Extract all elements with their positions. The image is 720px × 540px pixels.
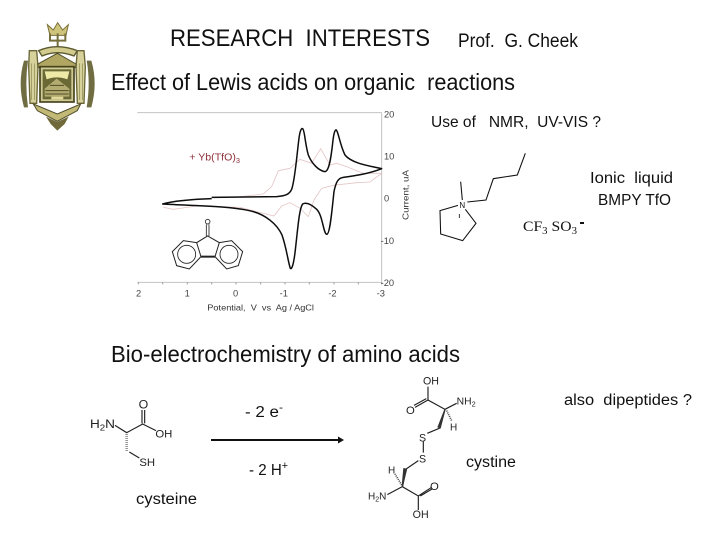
molecule: cystine: OH (413, 509, 429, 521)
molecule: cysteine: SH (139, 457, 155, 469)
section heading: Lewis acids: Effect of Lewis acids on organic reactions (111, 69, 515, 95)
chart axes (137, 113, 382, 284)
right axis labels: current: 20 (384, 109, 394, 119)
anion formula: 3 (572, 226, 577, 237)
molecule: cystine: S (419, 432, 426, 444)
molecule: cysteine (90, 398, 172, 469)
section heading: bio-electrochemistry: Bio-electrochemistry of amino acids (111, 341, 460, 367)
curve: fluorenone (163, 129, 382, 269)
molecule: cystine: H (368, 491, 375, 502)
molecule: cystine: O (430, 481, 439, 493)
axis title: current: Current, uA (401, 170, 411, 220)
molecule: cystine: H (388, 465, 395, 476)
axis title: potential: Potential, V vs Ag / AgCl (207, 302, 314, 312)
right axis labels: current: 0 (384, 194, 389, 204)
molecule: cysteine: OH (155, 428, 172, 440)
right axis labels: current: 10 (384, 152, 394, 162)
molecule: cysteine: O (139, 398, 148, 412)
molecule: cystine: 2 (472, 400, 476, 409)
right axis labels: current (381, 109, 394, 288)
author name: Prof. G. Cheek (458, 31, 578, 52)
bottom axis labels: potential: -2 (328, 288, 337, 298)
bottom axis labels: potential: 0 (233, 288, 238, 298)
molecule: cysteine: 2 (100, 422, 106, 432)
anion formula: CF (523, 219, 541, 235)
label: minus 2 electrons: - 2 e (245, 404, 276, 421)
molecule: cystine: 2 (375, 496, 379, 503)
molecule: cystine: S (419, 453, 426, 465)
label: cystine: cystine (466, 454, 516, 471)
label: plus Yb(TfO)3: + Yb(TfO) (189, 153, 233, 164)
label: ionic liquid: Ionic liquid (590, 170, 673, 187)
chart: cyclic voltammogram (136, 109, 411, 312)
molecule: BMPY cation (440, 153, 525, 241)
molecule: cystine: H (450, 422, 457, 433)
molecule: cystine: O (406, 405, 415, 417)
bottom axis labels: potential: 1 (185, 288, 190, 298)
anion charge (580, 222, 584, 224)
molecule: cystine: N (379, 491, 386, 502)
right axis labels: current: -20 (381, 278, 394, 288)
anion formula: 3 (542, 226, 548, 237)
molecule: cystine: NH (457, 397, 472, 408)
label: minus 2 electrons: - (279, 402, 283, 414)
bottom axis labels: potential (136, 288, 385, 298)
molecule: cystine: OH (423, 376, 439, 388)
label: BMPY TfO: BMPY TfO (598, 192, 671, 209)
anion formula: SO (548, 219, 572, 235)
bottom axis labels: potential: -1 (280, 288, 288, 298)
bottom axis labels: potential: -3 (377, 288, 385, 298)
molecule: cysteine: N (105, 418, 115, 431)
arrow: reaction (211, 436, 344, 444)
label: plus Yb(TfO)3: 3 (236, 158, 240, 165)
molecule: cysteine: H (90, 418, 98, 431)
curve: with Yb(TfO)3 (163, 149, 382, 217)
N atom label: N (459, 201, 465, 210)
title: RESEARCH INTERESTS (170, 25, 430, 52)
label: minus 2 protons: - 2 H (249, 462, 283, 479)
label: cysteine: cysteine (136, 491, 197, 508)
label: minus 2 protons: + (282, 460, 288, 472)
icon: naval academy crest (21, 23, 95, 131)
bottom axis labels: potential: 2 (136, 288, 141, 298)
note: NMR and UV-VIS: Use of NMR, UV-VIS ? (431, 114, 601, 131)
molecule: cystine (368, 376, 476, 521)
molecule: fluorenone (172, 219, 243, 269)
right axis labels: current: -10 (381, 236, 394, 246)
note: dipeptides: also dipeptides ? (564, 392, 692, 409)
